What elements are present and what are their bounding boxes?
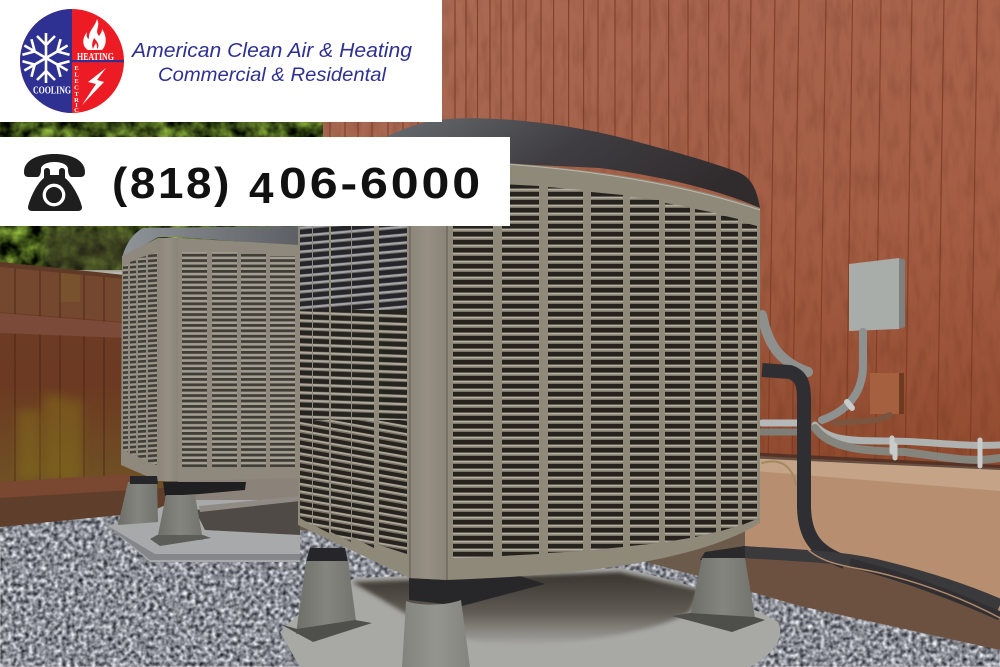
main unit: left face louvers [300,200,407,554]
phone number text: (818) [112,159,232,208]
main unit: casing [298,160,760,580]
company tagline: Commercial & Residental [158,65,387,86]
electrical junction box [849,258,905,331]
logo badge [20,9,124,114]
main unit: right face louvers [453,181,757,558]
main unit: right leg [672,546,765,632]
label: electric: C [74,84,79,92]
stucco foundation ledge [745,452,1000,650]
back air conditioning unit [108,226,300,562]
background: red wood siding wall [323,0,1000,470]
phone number text: 06-6000 [279,159,483,208]
icon: flame [83,19,106,50]
foreground air conditioning unit [280,118,765,667]
pipes and conduit on the wall [742,258,1000,618]
main unit: center leg and bracket [402,576,545,667]
back unit: lid [122,226,300,258]
label: electric: C [74,107,79,114]
label: cooling: COOLING [33,86,71,96]
main unit: corner post [408,160,447,580]
icon: snowflake [20,33,72,83]
label: heating: HEATING [77,52,114,63]
label: electric: R [74,97,79,104]
label: electric: E [74,78,79,85]
background: foliage behind the fence [0,120,345,273]
back unit: louvers [123,252,295,468]
label: electric: I [75,102,78,109]
gravel ground [0,515,1000,667]
back unit: yard behind and slab [108,478,300,562]
icon: telephone [24,154,85,211]
back unit: casing [121,238,300,481]
wood fence [0,262,165,535]
flexible conduit from box [822,332,863,420]
panel: phone number [0,137,510,226]
back unit: legs and bracket [118,476,246,546]
foreground concrete slab [280,568,780,667]
panel: logo header [0,0,442,122]
copper junction box [835,373,904,423]
label: electric: T [74,91,79,98]
phone number text: 4 [249,164,276,213]
icon: lightning bolt [82,68,106,105]
main unit: panel seams [410,161,760,580]
back unit: corner post [158,238,178,481]
label: electric: L [74,72,79,78]
main unit: rear left leg [280,548,372,642]
label: electric [74,65,79,114]
ground base behind the units [120,460,760,600]
main unit: lid [298,118,760,228]
company name: American Clean Air & Heating [131,40,412,62]
label: electric: E [74,65,79,72]
grey conduit runs [762,315,1000,466]
black refrigerant lines [742,370,1000,618]
